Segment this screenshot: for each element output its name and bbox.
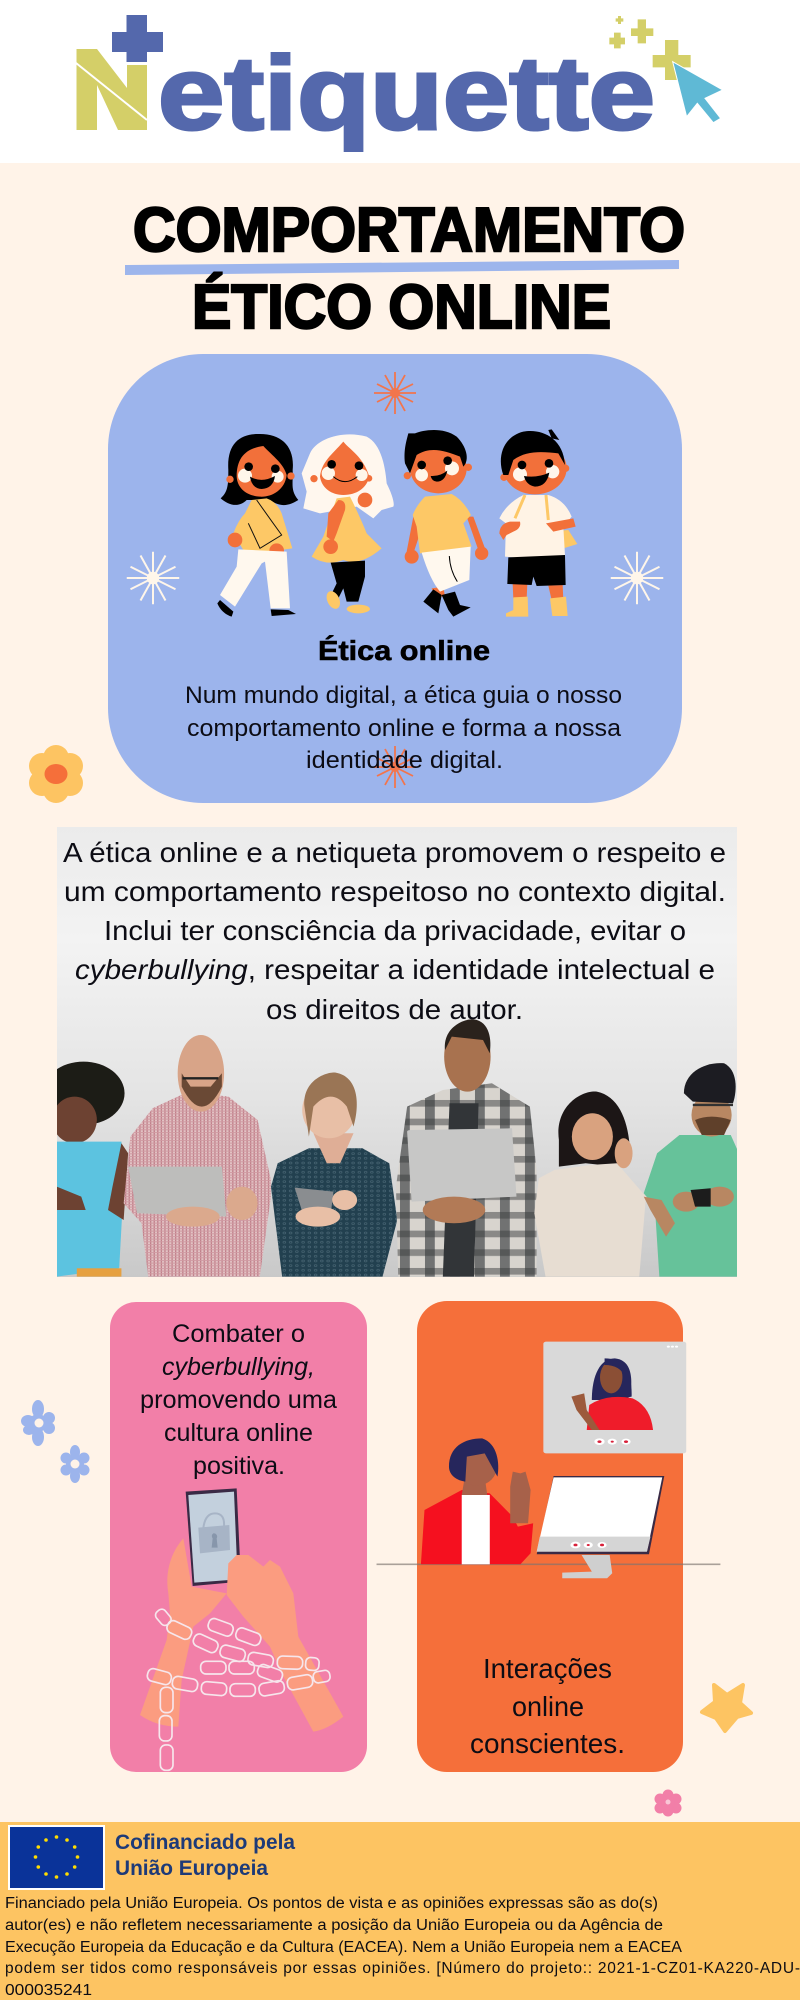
text: disclaimer: Financiado pela União Europeia. Os pontos de vista e as opiniões expressas são as do(s) [5,1895,658,1912]
text: ética online body: comportamento online e forma a nossa [187,715,622,742]
text: disclaimer: Execução Europeia da Educação e da Cultura (EACEA). Nem a União Europeia nem a EACEA [5,1939,683,1956]
text: photo paragraph: os direitos de autor. [266,994,523,1025]
icon: blue flower large [21,1400,55,1446]
icon: white burst right [611,552,663,604]
title: ÉTICO ONLINE [192,273,611,342]
text: cyberbullying panel: cyberbullying, [162,1353,315,1381]
icon: yellow flower [29,745,83,803]
text: photo paragraph: um comportamento respeitoso no contexto digital. [64,876,726,907]
text: disclaimer: 000035241 [5,1982,92,1999]
icon: orange burst top [374,372,416,414]
text: ética online body: identidade digital. [306,747,503,774]
footer band [0,1822,800,2000]
logo: Netiquette [76,15,723,152]
text: photo paragraph: Inclui ter consciência da privacidade, evitar o [104,915,686,946]
illustration: children girl 1 and girl 2 [217,434,394,617]
panel: ética online [108,354,682,803]
text: interações panel: Interações [483,1653,612,1684]
illustration: video call [377,1342,720,1578]
text: photo paragraph: A ética online e a netiqueta promovem o respeito e [63,837,726,868]
title underline [125,260,679,275]
text: ética online body: Num mundo digital, a ética guia o nosso [185,682,622,709]
photo: people with devices [42,1019,737,1277]
icon: white burst left [127,552,179,604]
text: photo paragraph [63,837,726,1025]
text: cyberbullying panel: Combater o [172,1320,305,1348]
title [125,196,685,342]
panel: photo with text [42,827,737,1277]
text: cyberbullying panel: positiva. [193,1452,285,1480]
text: cofinanciado [115,1831,295,1880]
icon: orange burst bottom [374,746,416,788]
illustration: chained hands with phone [140,1488,343,1770]
text: disclaimer: autor(es) e não refletem necessariamente a posição da União Europeia ou da Agência de [5,1917,663,1934]
text: interações panel: conscientes. [470,1728,625,1759]
text: cyberbullying panel: cultura online [164,1419,313,1447]
text: disclaimer [5,1895,800,1999]
text: ética online body [185,682,622,774]
header band [0,0,800,163]
text: cyberbullying panel: promovendo uma [140,1386,337,1414]
illustration: children boy 1 and boy 2 [404,429,577,617]
icon: EU flag [9,1826,104,1889]
logo: Netiquette: etiquette [158,36,655,152]
icon: blue flower small [60,1445,90,1483]
panel: interações online [377,1301,720,1772]
icon: yellow star [702,1685,751,1731]
heading: Ética online: Ética online [318,635,490,666]
panel: cyberbullying [110,1302,367,1772]
title: COMPORTAMENTO [133,196,685,265]
text: interações panel: online [512,1691,584,1722]
text: cofinanciado: União Europeia [115,1857,268,1880]
text: cyberbullying panel [140,1320,337,1480]
icon: pink flower [654,1790,682,1816]
text: photo paragraph: cyberbullying , respeitar a identidade intelectual e [75,954,715,985]
text: interações panel [470,1653,625,1759]
text: disclaimer: podem ser tidos como responsáveis por essas opiniões. [Número do projeto:: 2021-1-CZ01-KA220-ADU- [5,1960,800,1977]
text: cofinanciado: Cofinanciado pela [115,1831,295,1854]
